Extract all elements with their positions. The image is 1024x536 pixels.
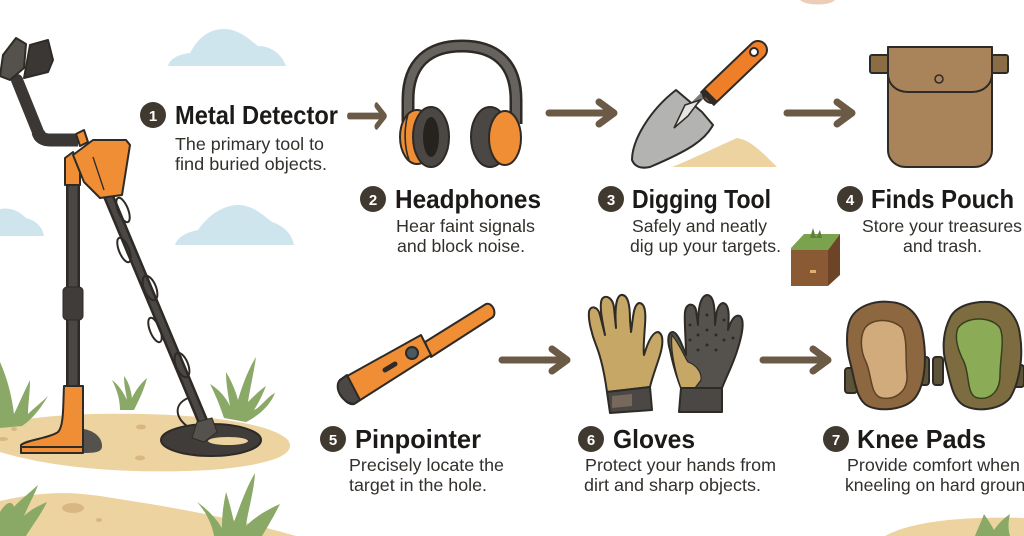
icon: gloves (589, 295, 743, 413)
label: digging tool: dig up your targets. (630, 236, 781, 256)
label: gloves: dirt and sharp objects. (584, 475, 761, 495)
label: knee pads: Knee Pads (857, 424, 986, 454)
grass clumps (0, 357, 1010, 536)
label: headphones (360, 184, 541, 256)
arrow 6 to 7 (763, 349, 828, 371)
label: digging tool: Digging Tool (632, 184, 771, 214)
label: gloves: Gloves (613, 424, 695, 454)
arrow 3 to 4 (787, 102, 852, 124)
label: finds pouch: Finds Pouch (871, 184, 1014, 214)
label: pinpointer: 5 (329, 432, 337, 449)
icon: pinpointer (338, 304, 494, 404)
icon: metal detector (0, 38, 261, 456)
ground: bottom sand (0, 493, 296, 536)
label: metal detector: Metal Detector (175, 100, 338, 130)
label: digging tool: 3 (607, 192, 615, 209)
label: finds pouch (837, 184, 1022, 256)
label: pinpointer: Precisely locate the (349, 455, 504, 475)
partial object at top edge (800, 0, 835, 4)
arrow 2 to 3 (549, 102, 614, 124)
ground: bottom right sand (885, 518, 1024, 536)
label: pinpointer (320, 424, 504, 495)
label: metal detector (140, 100, 338, 174)
label: gloves: Protect your hands from (585, 455, 776, 475)
icon: finds pouch (870, 47, 1008, 167)
arrow 5 to 6 (502, 349, 567, 371)
cloud: left edge (0, 209, 44, 236)
label: metal detector: 1 (149, 108, 157, 125)
icon: digging tool (632, 48, 777, 168)
cloud: lower centre (175, 205, 294, 245)
label: pinpointer: Pinpointer (355, 424, 481, 454)
icon: soil cube (791, 228, 840, 286)
label: finds pouch: Store your treasures (862, 216, 1022, 236)
label: knee pads: Provide comfort when (847, 455, 1020, 475)
label: headphones: Hear faint signals (396, 216, 535, 236)
sand pebbles (0, 424, 146, 522)
label: finds pouch: 4 (846, 192, 855, 209)
label: knee pads: 7 (832, 432, 840, 449)
label: metal detector: The primary tool to (175, 134, 324, 154)
label: knee pads (823, 424, 1024, 495)
label: gloves: 6 (587, 432, 595, 449)
label: digging tool: Safely and neatly (632, 216, 767, 236)
label: headphones: and block noise. (397, 236, 525, 256)
icon: knee pads (845, 302, 1024, 409)
label: headphones: Headphones (395, 184, 541, 214)
label: headphones: 2 (369, 192, 377, 209)
cloud: top centre (168, 29, 286, 66)
ground: main sand mound (0, 414, 290, 471)
label: finds pouch: and trash. (903, 236, 982, 256)
label: pinpointer: target in the hole. (349, 475, 487, 495)
label: gloves (578, 424, 776, 495)
arrow 1 to 2 (349, 106, 385, 126)
icon: headphones (400, 46, 521, 167)
label: metal detector: find buried objects. (175, 154, 327, 174)
label: digging tool (598, 184, 781, 256)
